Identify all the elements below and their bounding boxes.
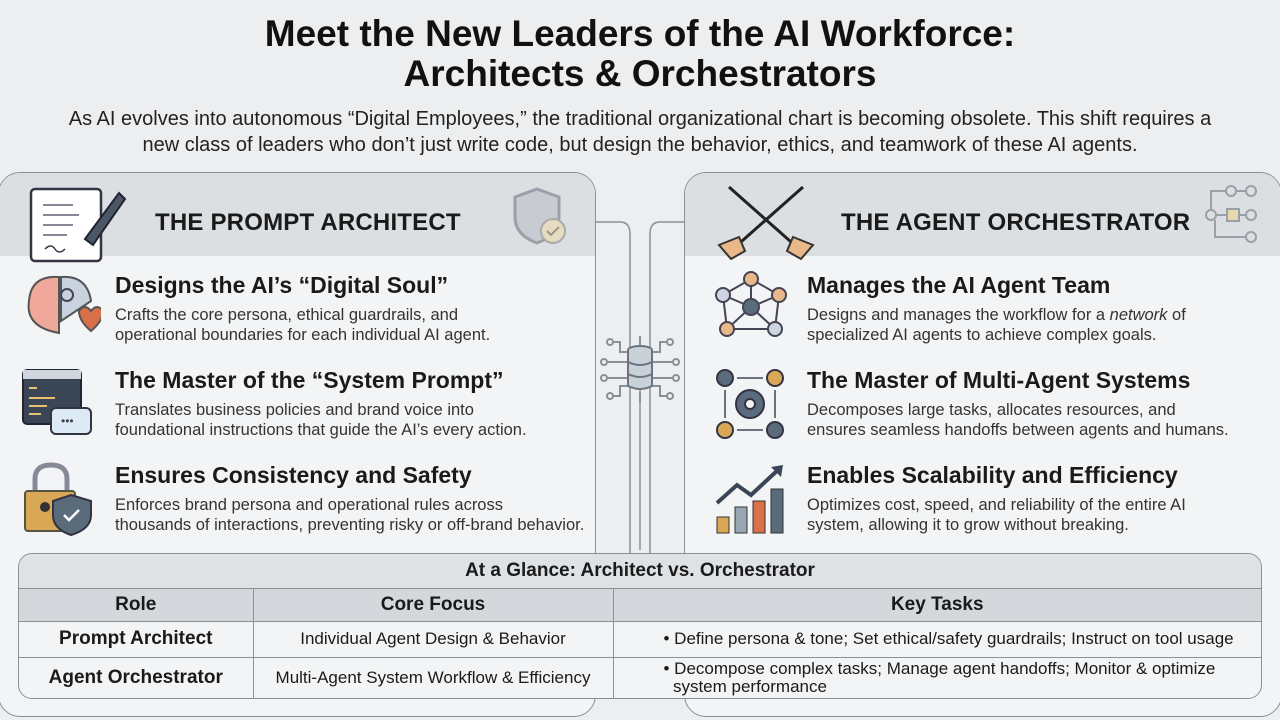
table: at a glance: Core Focus <box>381 594 485 614</box>
icon: scroll and pen <box>30 188 126 262</box>
title: Meet the New Leaders of the AI Workforce: <box>265 13 1015 54</box>
table: at a glance: At a Glance: Architect vs. Orchestrator <box>465 560 815 581</box>
panel: agent orchestrator: specialized AI agents to achieve complex goals. <box>807 326 1156 344</box>
icon: lock shield <box>24 462 92 536</box>
title: Architects & Orchestrators <box>404 53 876 94</box>
icon: growth chart <box>716 465 784 534</box>
panel: agent orchestrator: system, allowing it to grow without breaking. <box>807 516 1129 534</box>
panel: agent orchestrator: Designs and manages the workflow for a network of <box>807 306 1186 324</box>
panel: prompt architect: Designs the AI’s “Digital Soul” <box>115 272 448 298</box>
panel: prompt architect: Crafts the core persona, ethical guardrails, and <box>115 306 458 324</box>
connector lines <box>596 221 684 553</box>
table: at a glance: system performance <box>673 677 827 696</box>
item: consistency safety <box>24 462 584 536</box>
item: multi-agent <box>716 367 1229 439</box>
table: at a glance <box>18 553 1262 699</box>
panel: agent orchestrator: Optimizes cost, speed, and reliability of the entire AI <box>807 496 1186 514</box>
icon: shield <box>514 188 566 244</box>
table: at a glance: Multi-Agent System Workflow & Efficiency <box>276 668 590 687</box>
heading: the agent orchestrator: THE AGENT ORCHESTRATOR <box>841 209 1190 236</box>
heading: the prompt architect: THE PROMPT ARCHITECT <box>155 209 461 236</box>
panel: agent orchestrator <box>684 172 1280 717</box>
table: at a glance: Key Tasks <box>891 594 984 614</box>
panel: prompt architect <box>0 172 596 717</box>
title <box>265 13 1015 94</box>
subtitle: new class of leaders who don’t just write code, but design the behavior, ethics, and teamwork of these AI agents. <box>142 134 1138 156</box>
panel: prompt architect: thousands of interactions, preventing risky or off-brand behavior. <box>115 516 584 534</box>
panel: prompt architect: The Master of the “System Prompt” <box>115 367 504 393</box>
icon: workflow <box>1205 185 1257 243</box>
panel: prompt architect: Ensures Consistency and Safety <box>115 462 472 488</box>
subtitle <box>68 108 1212 156</box>
panel: agent orchestrator: Enables Scalability and Efficiency <box>807 462 1178 488</box>
item: team <box>715 271 1186 344</box>
panel: prompt architect: operational boundaries for each individual AI agent. <box>115 326 490 344</box>
item: scalability <box>716 462 1186 534</box>
icon: code window <box>22 369 92 435</box>
table: at a glance: Agent Orchestrator <box>49 667 223 688</box>
panel: agent orchestrator: Manages the AI Agent Team <box>807 272 1110 298</box>
icon: gears <box>716 369 784 439</box>
panel: agent orchestrator: Decomposes large tasks, allocates resources, and <box>807 401 1176 419</box>
icon: central database hub <box>600 336 680 402</box>
item: digital soul <box>28 272 490 344</box>
panel: prompt architect: Enforces brand persona and operational rules across <box>115 496 503 514</box>
table: at a glance: Prompt Architect <box>59 628 212 649</box>
panel: agent orchestrator: ensures seamless handoffs between agents and humans. <box>807 421 1229 439</box>
icon: network <box>715 271 787 337</box>
icon: batons <box>717 186 815 260</box>
table: at a glance: Role <box>115 594 156 614</box>
panel: prompt architect: foundational instructions that guide the AI’s every action. <box>115 421 527 439</box>
icon: code window: ••• <box>61 414 74 428</box>
panel: agent orchestrator: The Master of Multi-Agent Systems <box>807 367 1190 393</box>
item: system prompt <box>22 367 527 439</box>
subtitle: As AI evolves into autonomous “Digital Employees,” the traditional organizational chart is becoming obsolete. This shift requires a <box>69 108 1211 130</box>
icon: brain heart <box>28 276 101 334</box>
table: at a glance: • Decompose complex tasks; Manage agent handoffs; Monitor & optimize <box>664 659 1215 678</box>
panel: prompt architect: Translates business policies and brand voice into <box>115 401 474 419</box>
table: at a glance: • Define persona & tone; Set ethical/safety guardrails; Instruct on tool usage <box>664 629 1234 648</box>
table: at a glance: Individual Agent Design & Behavior <box>300 629 566 648</box>
